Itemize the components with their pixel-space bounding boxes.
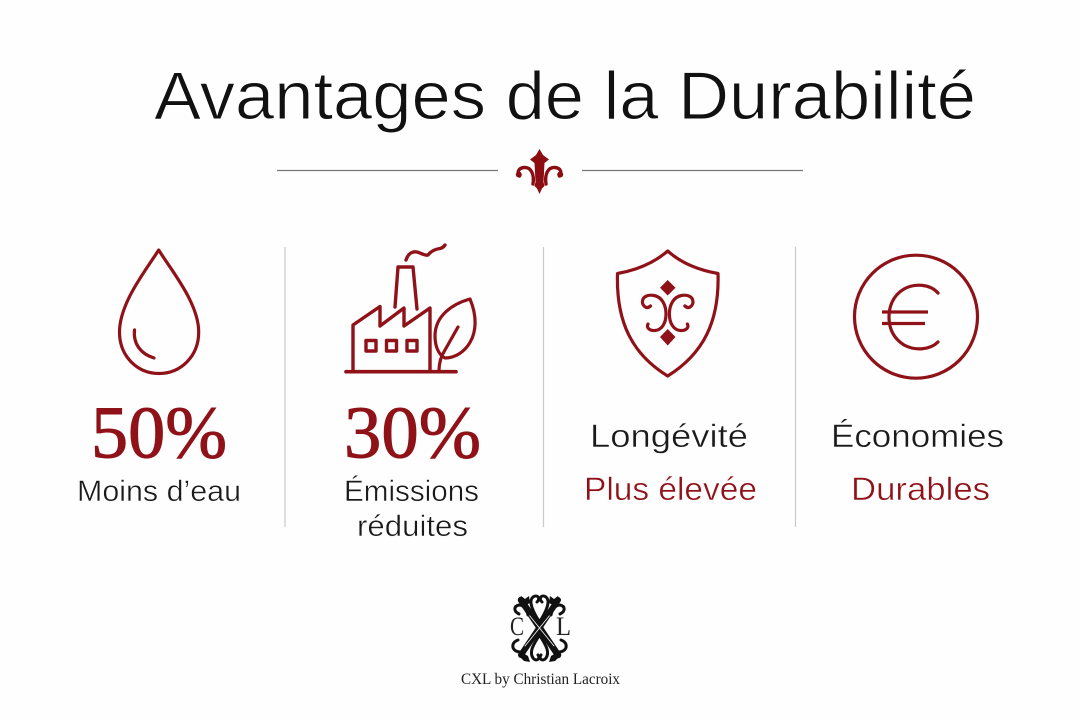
column dividers <box>285 247 796 527</box>
title: Avantages de la Durabilité <box>154 58 976 134</box>
label: Économies: Économies <box>831 418 1004 454</box>
panel: reduced emissions <box>344 245 481 543</box>
stat: 50%: 50% <box>91 392 227 474</box>
icon: euro in circle <box>854 255 978 378</box>
icon: water drop <box>120 250 199 374</box>
logo: CXL monogram: C <box>510 612 524 641</box>
stat: 30%: 30% <box>344 392 481 474</box>
panel: water savings <box>77 250 241 508</box>
label: Durables: Durables <box>851 471 990 507</box>
label: Émissions réduites: Émissions <box>344 475 479 508</box>
label: Plus élevée: Plus élevée <box>584 471 757 507</box>
panel: longevity <box>584 251 757 507</box>
brand name: CXL by Christian Lacroix <box>461 671 620 688</box>
title ornament: divider with fleur-de-lis <box>277 149 803 194</box>
logo: CXL monogram: L <box>556 612 571 641</box>
logo: CXL monogram <box>510 596 571 662</box>
label: Émissions réduites <box>344 475 479 543</box>
panel: savings <box>831 255 1004 507</box>
icon: factory with leaf <box>346 245 475 372</box>
label: Émissions réduites: réduites <box>357 510 468 543</box>
label: Longévité: Longévité <box>590 418 748 454</box>
label: Moins d'eau: Moins d’eau <box>77 475 241 508</box>
icon: shield with fleuron <box>617 251 718 376</box>
